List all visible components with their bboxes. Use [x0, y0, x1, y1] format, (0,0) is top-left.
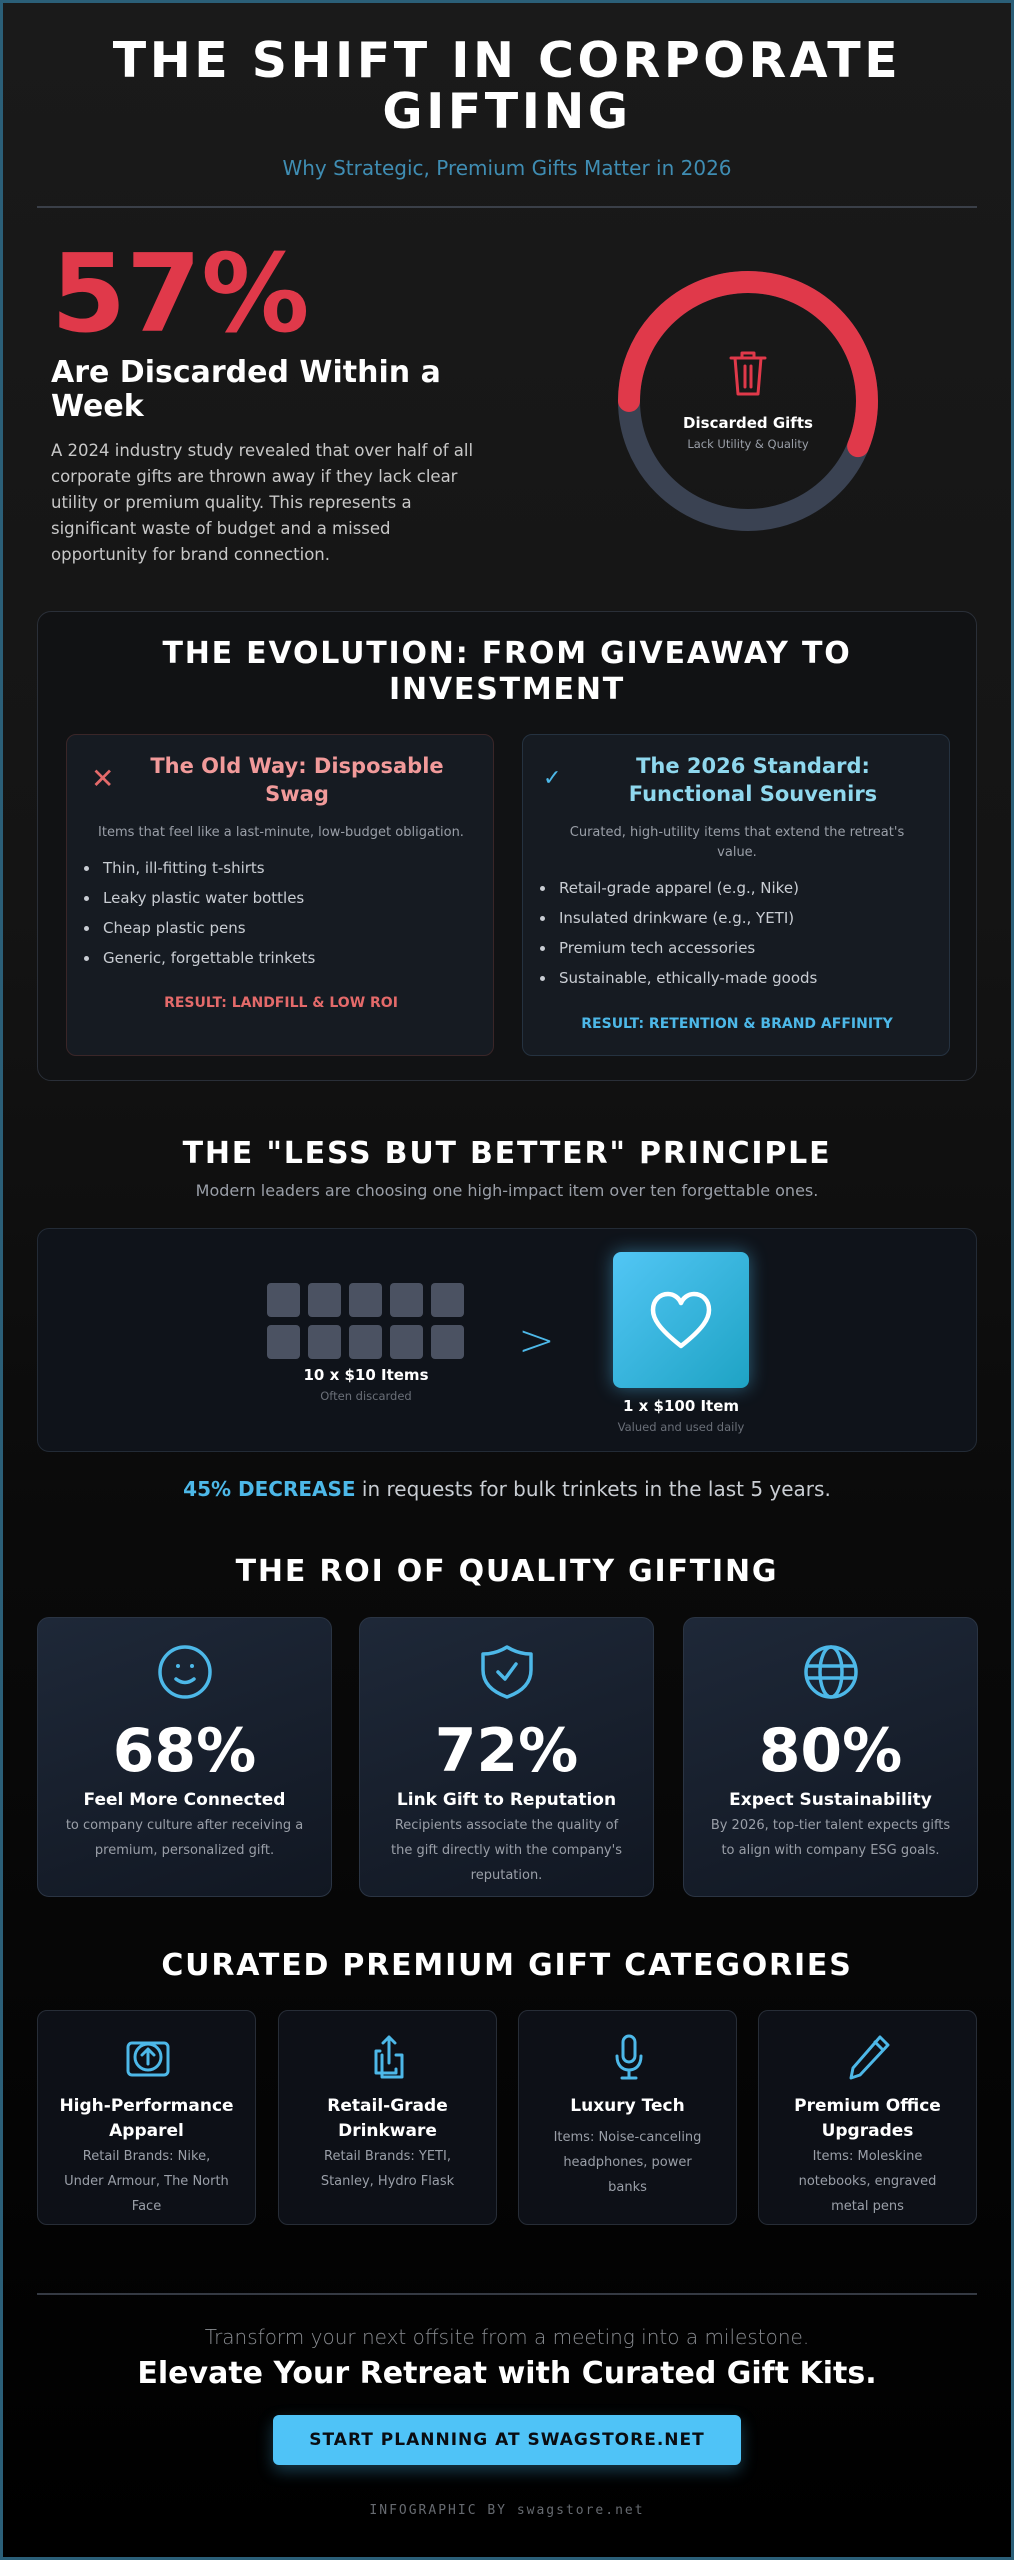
title	[113, 32, 901, 140]
card: old way	[66, 734, 494, 1056]
standard title: The 2026 Standard: Functional Souvenirs	[629, 754, 877, 806]
standard list: Retail-grade apparel (e.g., Nike)	[559, 879, 799, 897]
card: 72%: 72%	[435, 1716, 578, 1786]
card: tech: Items: Noise-canceling headphones, power banks	[554, 2130, 701, 2195]
label: 10 items: Often discarded	[320, 1389, 412, 1403]
card: office: Items: Moleskine notebooks, engraved metal pens	[799, 2149, 936, 2214]
old way list: Thin, ill-fitting t-shirts	[103, 859, 265, 877]
label: 10 items	[303, 1366, 428, 1403]
old way list	[84, 859, 315, 967]
old way list: Leaky plastic water bottles	[103, 889, 304, 907]
icon: pen	[850, 2035, 890, 2080]
heading: categories: CURATED PREMIUM GIFT CATEGORIES	[161, 1948, 853, 1983]
card: old way: Items that feel like a last-minute, low-budget obligation.	[98, 825, 464, 840]
label: 1 item: Valued and used daily	[618, 1420, 744, 1434]
icon: smile	[158, 1645, 212, 1699]
card: 80%: By 2026, top-tier talent expects gifts to align with company ESG goals.	[711, 1818, 950, 1858]
card: 72%: Recipients associate the quality of the gift directly with the company's reputation.	[391, 1818, 622, 1883]
heading: evolution: THE EVOLUTION: FROM GIVEAWAY TO	[162, 636, 852, 671]
icon: check: ✓	[543, 766, 561, 791]
icon: x: ✕	[91, 762, 114, 795]
icon: premium item	[613, 1252, 749, 1388]
heading: evolution	[162, 636, 852, 707]
heading: roi: THE ROI OF QUALITY GIFTING	[236, 1554, 778, 1589]
label: 1 item	[618, 1397, 744, 1434]
card: 72%: Link Gift to Reputation	[397, 1790, 616, 1810]
cta button: START PLANNING AT SWAGSTORE.NET	[309, 2430, 705, 2450]
card: 80%: 80%	[759, 1716, 902, 1786]
card: tech	[518, 2010, 737, 2225]
icon: share/drinkware	[374, 2035, 404, 2078]
card: drinkware	[278, 2010, 497, 2225]
title: THE SHIFT IN CORPORATE	[113, 32, 901, 89]
card: 2026 standard	[522, 734, 950, 1056]
card: apparel: High-Performance Apparel	[59, 2096, 234, 2141]
stat line: 45% decrease: 45% DECREASE in requests for bulk trinkets in the last 5 years.	[183, 1477, 831, 1501]
stat: 57%: 57%	[51, 232, 310, 357]
old way list: Cheap plastic pens	[103, 919, 246, 937]
stat heading: Are Discarded Within a Week	[51, 355, 441, 424]
donut chart: Lack Utility & Quality	[687, 437, 809, 451]
card: 68%: to company culture after receiving a premium, personalized gift.	[66, 1818, 303, 1858]
card: 72%	[359, 1617, 654, 1897]
label: 10 items: 10 x $10 Items	[303, 1366, 428, 1384]
old way list: Generic, forgettable trinkets	[103, 949, 315, 967]
label: 1 item: 1 x $100 Item	[623, 1397, 739, 1415]
standard result: RESULT: RETENTION & BRAND AFFINITY	[581, 1016, 893, 1032]
card: apparel: Retail Brands: Nike, Under Armour, The North Face	[64, 2149, 229, 2214]
card: drinkware: Retail Brands: YETI, Stanley, Hydro Flask	[321, 2149, 454, 2189]
standard list	[540, 879, 817, 987]
donut chart	[618, 271, 878, 531]
card: 68%: 68%	[113, 1716, 256, 1786]
card: 2026 standard: Curated, high-utility items that extend the retreat's value.	[570, 825, 904, 860]
card: 68%	[37, 1617, 332, 1897]
card: tech: Luxury Tech	[570, 2096, 685, 2116]
heading: less but better: THE "LESS BUT BETTER" PRINCIPLE	[183, 1136, 831, 1171]
card: 80%: Expect Sustainability	[729, 1790, 932, 1810]
standard list: Sustainable, ethically-made goods	[559, 969, 817, 987]
card: office	[758, 2010, 977, 2225]
icon: globe	[804, 1645, 858, 1699]
card: office: Premium Office Upgrades	[794, 2096, 941, 2141]
cta tagline: Transform your next offsite from a meeting into a milestone.	[205, 2325, 809, 2349]
icon grid: 10 items	[267, 1283, 464, 1359]
icon: microphone	[616, 2034, 642, 2080]
standard list: Premium tech accessories	[559, 939, 755, 957]
subtitle: Why Strategic, Premium Gifts Matter in 2026	[282, 156, 732, 180]
donut chart: Discarded Gifts	[683, 414, 813, 432]
old way result: RESULT: LANDFILL & LOW ROI	[164, 995, 398, 1011]
icon: trash	[731, 353, 765, 394]
old way title: The Old Way: Disposable Swag	[150, 754, 444, 806]
footer: INFOGRAPHIC BY swagstore.net	[369, 2503, 645, 2518]
standard list: Insulated drinkware (e.g., YETI)	[559, 909, 794, 927]
title: GIFTING	[382, 83, 632, 140]
icon: camera-like apparel	[126, 2042, 170, 2076]
cta button	[273, 2415, 741, 2465]
card: 68%: Feel More Connected	[84, 1790, 285, 1810]
heading: evolution: INVESTMENT	[389, 672, 625, 707]
arrow: greater than: >	[518, 1315, 555, 1366]
card: 80%	[683, 1617, 978, 1897]
card: apparel	[37, 2010, 256, 2225]
panel: comparison	[37, 1228, 977, 1452]
subheading: Modern leaders are choosing one high-impact item over ten forgettable ones.	[196, 1181, 818, 1200]
cta heading: Elevate Your Retreat with Curated Gift Kits.	[137, 2356, 877, 2391]
card: drinkware: Retail-Grade Drinkware	[327, 2096, 448, 2141]
panel: evolution	[37, 611, 977, 1081]
stat paragraph: A 2024 industry study revealed that over half of all corporate gifts are thrown away if they lack clear utility or premium quality. This represents a significant waste of budget and a missed opportunity for brand connection.	[51, 441, 473, 564]
icon: shield	[481, 1645, 533, 1699]
